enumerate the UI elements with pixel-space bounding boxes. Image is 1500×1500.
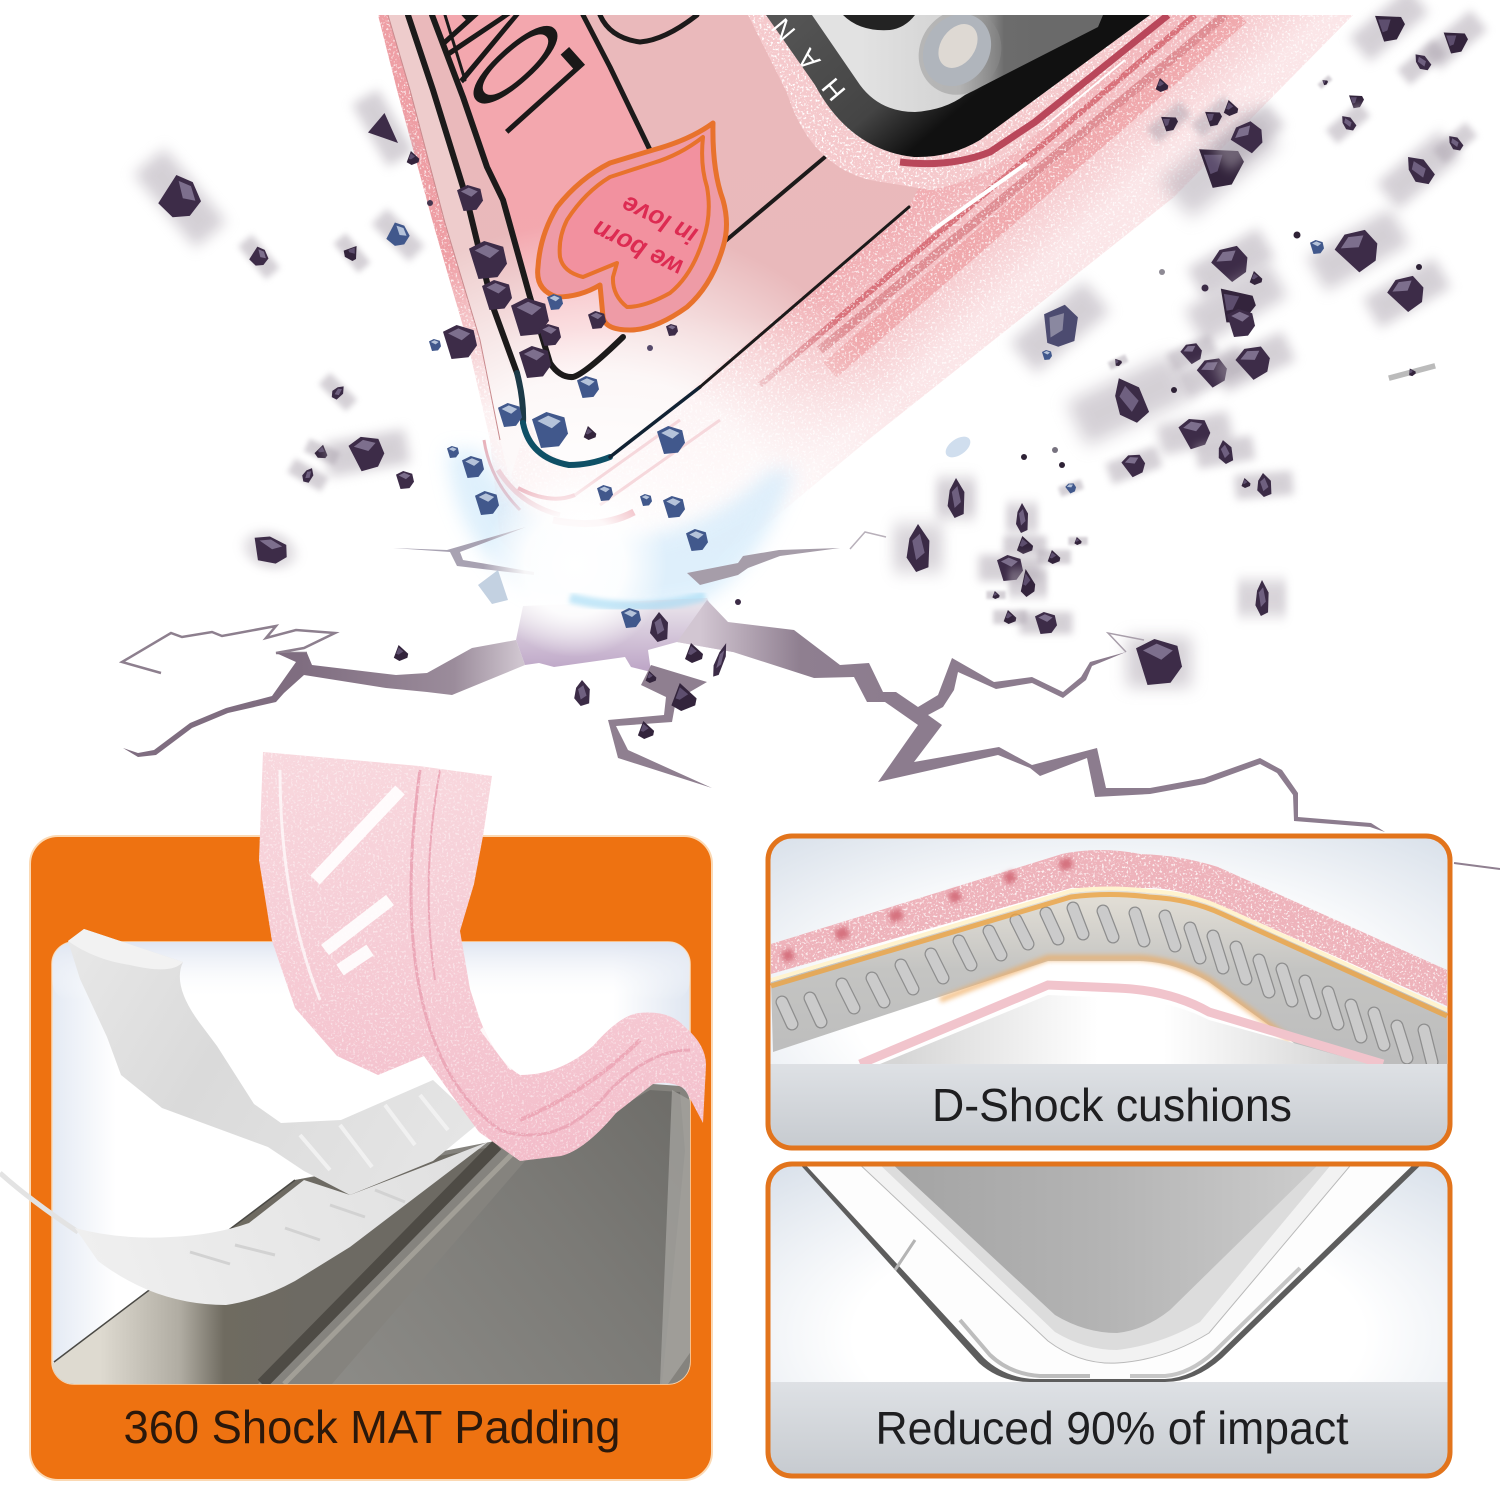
rocks: left scatter (134, 87, 741, 739)
rose edge beside camera (900, 15, 1168, 164)
right crack thin tips (1108, 633, 1144, 652)
panel background (768, 836, 1450, 1148)
orange inner glow (940, 958, 1290, 1040)
case white bumper (801, 1160, 1418, 1379)
pink stripe (436, 15, 700, 314)
phone silver flank (52, 1147, 492, 1384)
phone light band (284, 1150, 516, 1384)
heart outline (538, 123, 726, 330)
left crack upper thin edge (122, 626, 335, 673)
black outline curves (408, 15, 909, 465)
camera lens (918, 15, 1001, 95)
bumper dark dots (783, 862, 1072, 958)
rocks: right upper scatter (942, 0, 1487, 499)
corner shading (960, 1320, 1090, 1376)
black camera bump (766, 15, 1150, 157)
phone back plate (332, 1090, 685, 1384)
caption: 360 Shock MAT Padding (124, 1401, 620, 1453)
brand letters on bump: HAN (766, 12, 852, 106)
heart sticker (538, 123, 726, 330)
phone right sheen (660, 1090, 692, 1384)
corner shading right (1130, 1268, 1300, 1376)
phone body (52, 1084, 690, 1384)
case outer glitter body (378, 15, 1353, 490)
strap translucent window (480, 1027, 512, 1070)
phone in padding (52, 1084, 692, 1384)
right crack body (677, 600, 1385, 832)
phone dark edge band (262, 1145, 497, 1384)
ground cracks (122, 527, 1500, 869)
panel: 360 Shock MAT Padding (0, 750, 712, 1480)
grey back plate (888, 1160, 1323, 1333)
impact pale blue halo (447, 450, 795, 609)
left crack body (123, 640, 525, 757)
upper left crack (393, 527, 534, 575)
upper lens (843, 15, 915, 30)
inner ring (855, 1160, 1355, 1363)
crack exit right of panel (1454, 863, 1500, 869)
inner photo area (52, 942, 690, 1384)
panel border (768, 1164, 1450, 1476)
upper right crack tip (850, 532, 886, 549)
side button seam (895, 1240, 915, 1270)
upper right crack (687, 548, 840, 585)
case back panel (411, 15, 918, 389)
strap edge folds (411, 770, 690, 1135)
left rim strip (388, 15, 514, 400)
caption bar (768, 1064, 1450, 1150)
panel: D-Shock cushions (768, 836, 1451, 1150)
impact flash (483, 473, 667, 657)
glitter speckle (378, 15, 1352, 468)
camera inner (812, 15, 1103, 112)
pink strap (255, 750, 710, 1165)
strap highlights (315, 790, 400, 970)
case outer edge (796, 1160, 1426, 1382)
phone case impacting the ground (378, 15, 1353, 525)
lower branch crack (608, 665, 712, 788)
heart inner (560, 137, 709, 307)
rose streaks along case edge (760, 15, 1240, 385)
heart text line 2: in love (617, 190, 702, 252)
cushion band (771, 890, 1447, 1064)
caption: D-Shock cushions (932, 1079, 1292, 1131)
lower pink rim (860, 985, 1383, 1064)
inner top tint (52, 942, 690, 1002)
rose corner arcs (484, 420, 720, 524)
inner phone glass (880, 995, 1370, 1064)
cushion grooves (782, 908, 1432, 1062)
phone outline (54, 1180, 295, 1362)
thin rim line (388, 15, 500, 440)
panel border (768, 836, 1450, 1148)
inner rim lines (875, 1160, 1335, 1350)
lower white padding ribbon (0, 1142, 488, 1305)
crack pit (516, 598, 733, 672)
caption bar (768, 1382, 1450, 1478)
impact blue arc (570, 596, 705, 606)
pink case bumper top (771, 850, 1447, 1006)
rocks: right lower scatter (893, 478, 1286, 687)
white fade around the impact (448, 242, 858, 598)
caption: Reduced 90% of impact (876, 1402, 1349, 1454)
glitter ring around camera (748, 15, 1178, 195)
upper grey padding ribbon (68, 929, 479, 1195)
panel: Reduced 90% of impact (768, 1160, 1450, 1478)
orange frame (30, 836, 712, 1480)
panel background (768, 1164, 1450, 1476)
heart text line 1: we born (587, 214, 688, 284)
orange glow line (771, 888, 1447, 1010)
